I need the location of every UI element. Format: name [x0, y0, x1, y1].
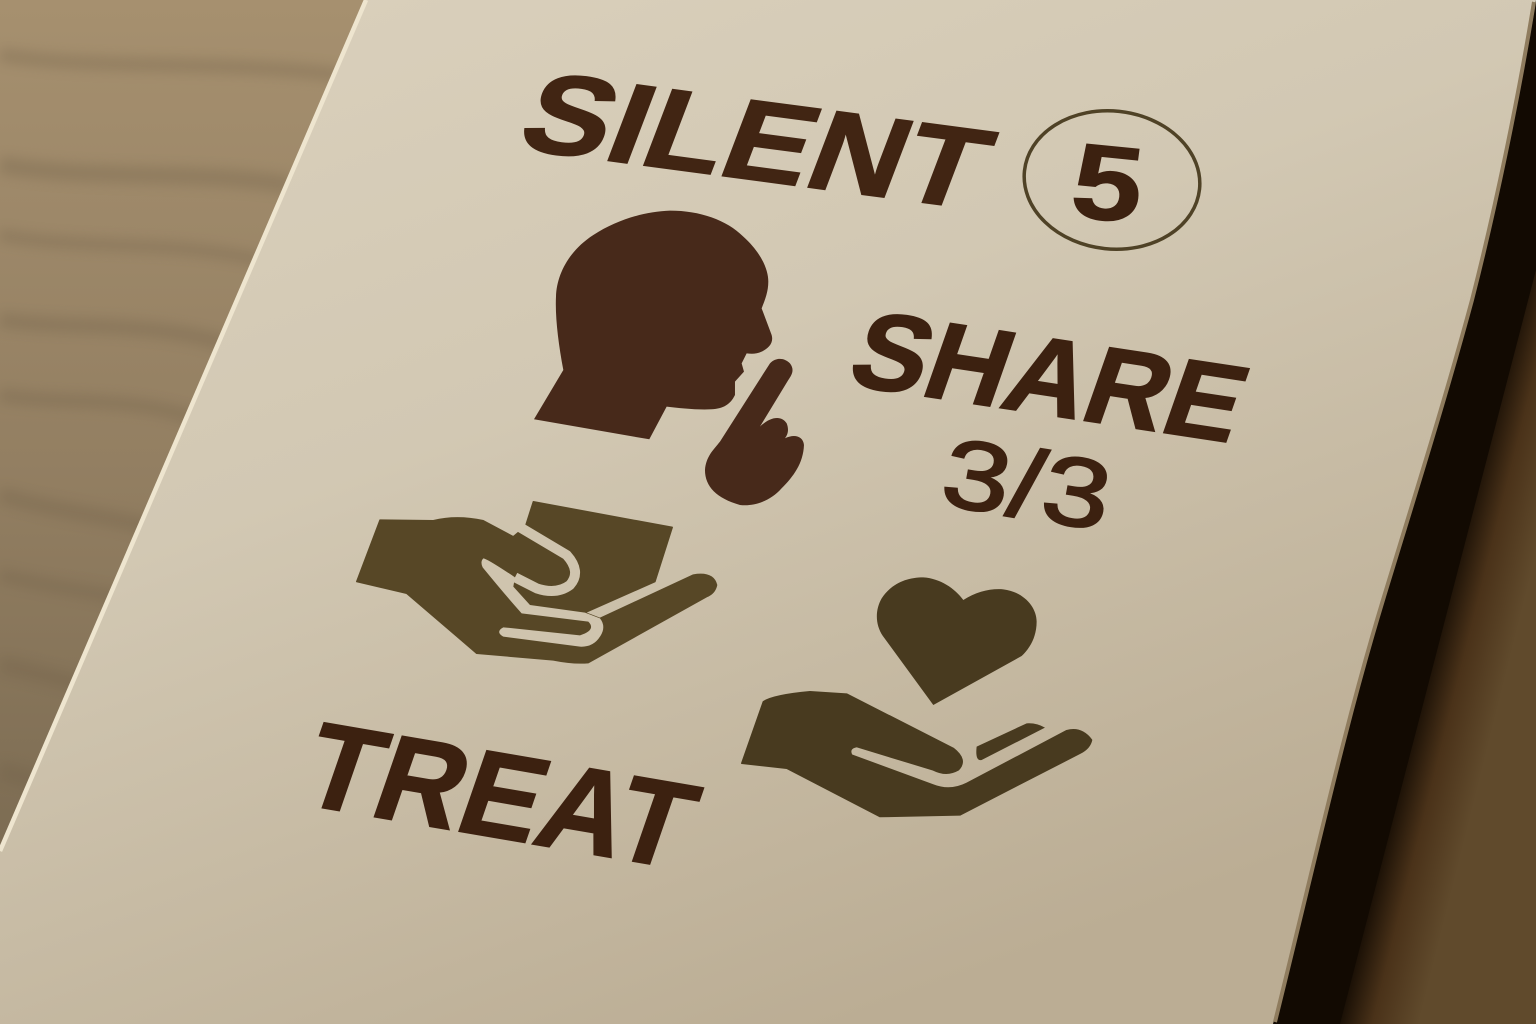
- title: SILENT: SILENT: [505, 49, 1009, 233]
- text: TREAT: TREAT: [286, 697, 714, 894]
- icon: hand holding card: [357, 502, 717, 663]
- icon: silent head with finger to lips: [534, 211, 804, 505]
- raised finger hand: [705, 359, 804, 505]
- head silhouette: [534, 211, 772, 439]
- badge: circled 5: [1017, 102, 1207, 258]
- text: 3/3: 3/3: [934, 417, 1120, 551]
- badge: circled 5: 5: [1065, 120, 1151, 246]
- icon: open hand: [742, 692, 1092, 817]
- icon: heart: [877, 577, 1037, 705]
- text: SHARE: SHARE: [836, 289, 1263, 466]
